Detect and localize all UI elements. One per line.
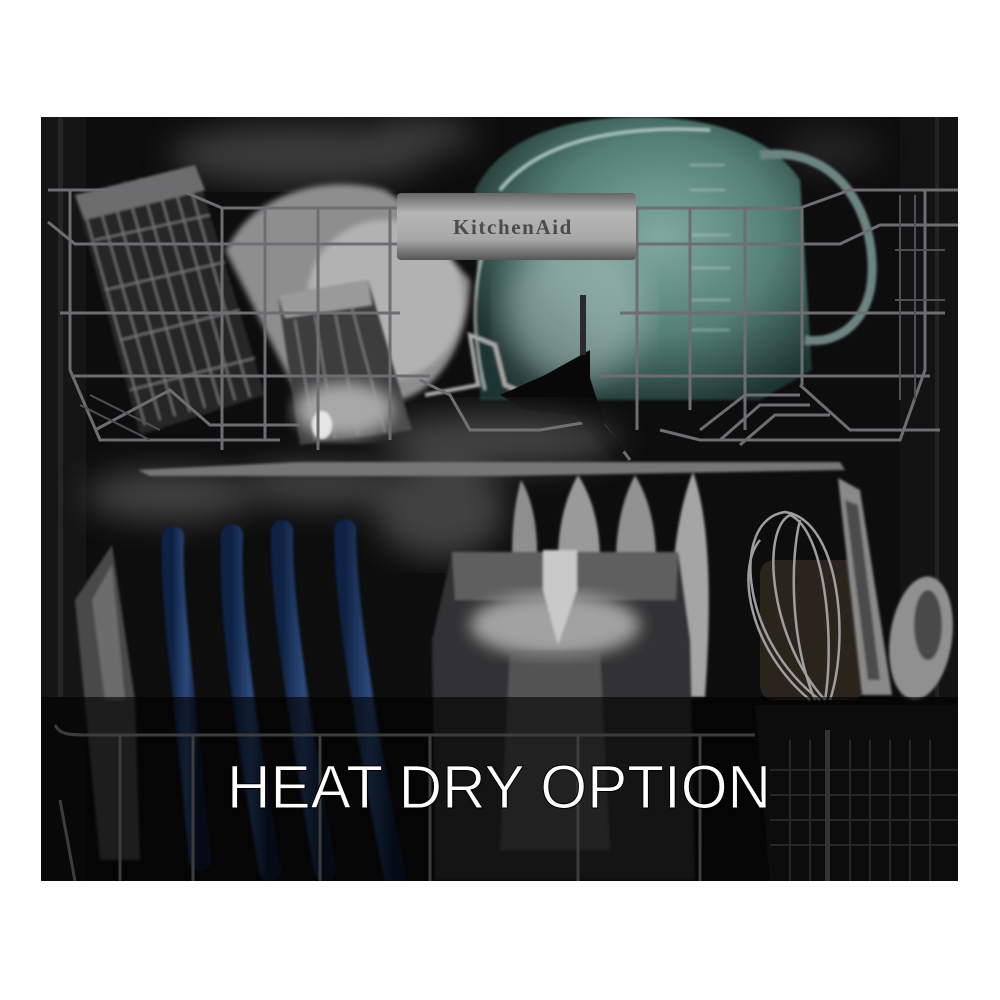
panel: photo background — [41, 117, 958, 881]
slotted spoon — [887, 574, 955, 700]
glass stack left — [75, 165, 265, 435]
utensil basket — [770, 730, 958, 881]
KitchenAid badge: KitchenAid — [453, 215, 573, 239]
measuring bowl — [425, 117, 872, 400]
steam: upper — [170, 117, 880, 185]
rack shelf — [138, 462, 845, 476]
bottom caption band — [41, 697, 958, 881]
infographic: dishwasher photo with caption — [41, 117, 958, 881]
whisk — [748, 512, 865, 700]
baking pan — [75, 545, 140, 860]
blade holder — [500, 295, 625, 460]
title: HEAT DRY OPTION — [227, 753, 771, 821]
lower rack wires — [55, 725, 755, 881]
rack side wires — [80, 195, 945, 440]
tub side shading — [41, 117, 958, 697]
glass tumbler — [278, 280, 412, 445]
blue plates — [173, 530, 395, 875]
blender jar — [432, 550, 695, 880]
plates rear — [512, 472, 709, 697]
grater — [838, 478, 892, 695]
upper rack wires — [48, 190, 958, 460]
steam: middle — [85, 412, 620, 558]
white plate — [225, 184, 470, 400]
photo: dishwasher interior — [41, 117, 960, 881]
KitchenAid badge — [397, 193, 636, 260]
